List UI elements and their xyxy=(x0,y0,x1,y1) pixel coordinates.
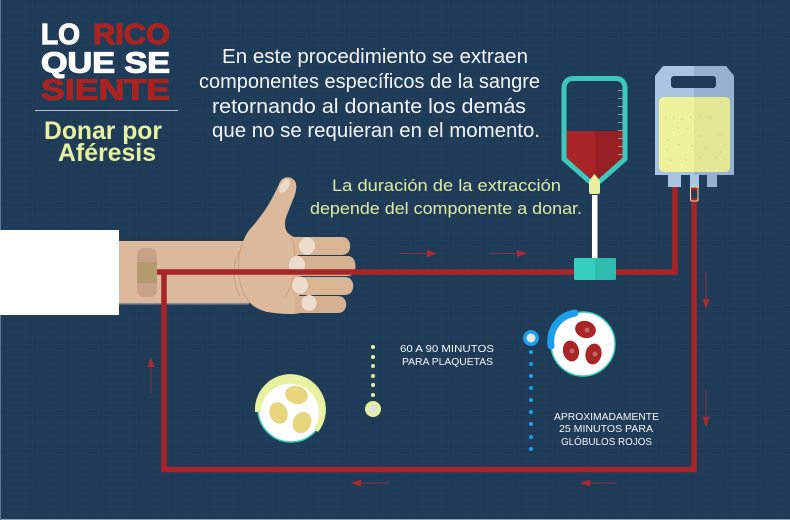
title: Lo rico que se siente xyxy=(41,19,170,106)
platelets label: PARA PLAQUETAS xyxy=(402,356,493,368)
icon: red cells circle xyxy=(551,312,615,376)
platelets label: 60 A 90 MINUTOS xyxy=(400,343,494,355)
intro text xyxy=(199,46,540,142)
subtitle: Donar por Aféresis: Aféresis xyxy=(58,139,156,167)
tube loop xyxy=(157,187,694,470)
flow arrows xyxy=(148,250,710,486)
tube connector xyxy=(574,258,616,280)
platelets timeline dots xyxy=(365,345,381,417)
intro text: que no se requieran en el momento. xyxy=(212,120,540,142)
title: Lo rico que se siente: QUE SE xyxy=(41,48,170,80)
intro text: componentes específicos de la sangre xyxy=(199,71,540,93)
duration text xyxy=(310,176,582,218)
icon: collection flask xyxy=(564,78,625,260)
title: Lo rico que se siente: SIENTE xyxy=(41,74,170,106)
icon: blood bag xyxy=(655,66,734,201)
duration text: depende del componente a donar. xyxy=(310,199,582,218)
white sleeve cuff xyxy=(0,230,119,315)
red cells timeline dots xyxy=(523,330,539,451)
red cells label: APROXIMADAMENTE xyxy=(554,411,659,423)
icon: platelets circle xyxy=(255,374,326,442)
title: Lo rico que se siente: RICO xyxy=(93,19,170,51)
fingers xyxy=(293,237,356,313)
title: Lo rico que se siente: LO xyxy=(41,19,80,51)
icon: arm and hand xyxy=(119,177,356,314)
subtitle: Donar por Aféresis: Donar por xyxy=(44,117,162,145)
platelets label xyxy=(400,343,494,368)
intro text: En este procedimiento se extraen xyxy=(222,46,528,68)
subtitle: Donar por Aféresis xyxy=(44,117,162,167)
intro text: retornando al donante los demás xyxy=(212,96,526,118)
red cells label: GLÓBULOS ROJOS xyxy=(561,435,652,448)
fingernails xyxy=(279,179,316,311)
duration text: La duración de la extracción xyxy=(332,176,561,195)
red cells label xyxy=(554,411,659,448)
icon: bandage xyxy=(137,248,157,297)
red cells label: 25 MINUTOS PARA xyxy=(559,423,653,435)
